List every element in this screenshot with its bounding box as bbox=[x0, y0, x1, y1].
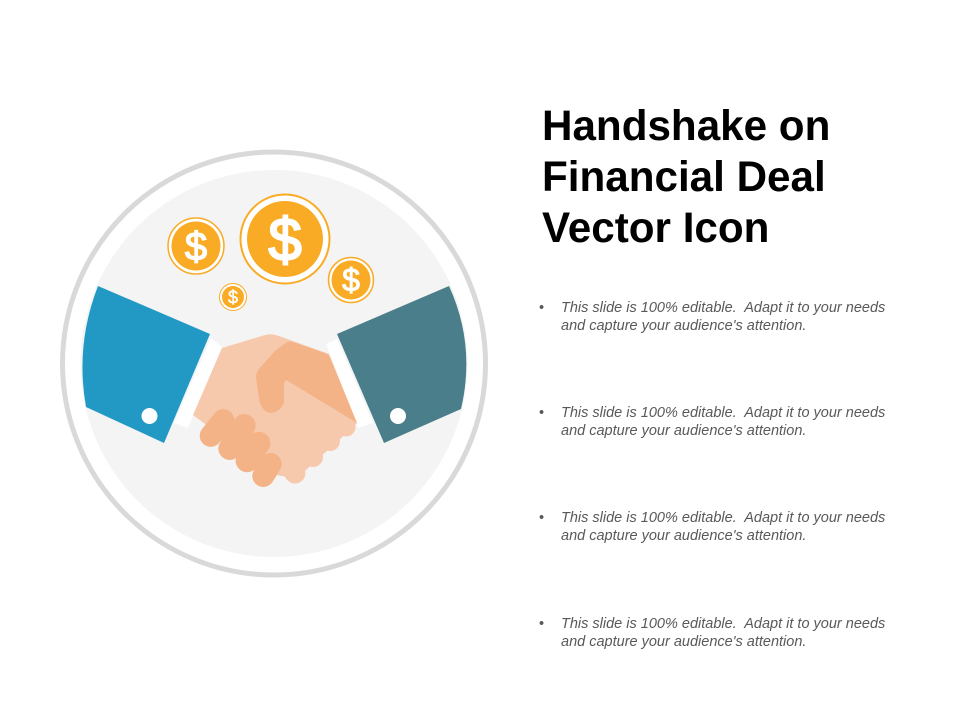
left sleeve bbox=[82, 286, 210, 443]
coin: small: $ bbox=[228, 288, 238, 308]
knuckle scallops bbox=[284, 418, 356, 484]
coin: large bbox=[240, 194, 330, 284]
bullet text 2: • bbox=[539, 405, 544, 421]
bullet text 4: This slide is 100% editable. Adapt it to your needs and capture your audience's attention. bbox=[561, 616, 885, 650]
bullet text 4: • bbox=[539, 616, 544, 632]
title: Vector Icon bbox=[542, 204, 769, 251]
title bbox=[542, 102, 830, 251]
finger 2 bbox=[214, 410, 260, 464]
right sleeve bbox=[337, 286, 466, 443]
title: Handshake on bbox=[542, 102, 830, 149]
coin: right bbox=[328, 258, 374, 302]
bullet text 2: This slide is 100% editable. Adapt it to your needs and capture your audience's attention. bbox=[561, 405, 885, 439]
light hand bbox=[193, 334, 357, 479]
coin: right: $ bbox=[342, 262, 360, 298]
bullet text 3: This slide is 100% editable. Adapt it to your needs and capture your audience's attention. bbox=[561, 510, 885, 544]
left cuff bbox=[174, 338, 222, 428]
right cuff bbox=[326, 339, 373, 428]
bullet text 3: • bbox=[539, 510, 544, 526]
coin: small bbox=[220, 284, 246, 310]
finger 3 bbox=[231, 427, 275, 477]
handshake bbox=[193, 334, 357, 491]
title: Financial Deal bbox=[542, 153, 826, 200]
bullet text 1: This slide is 100% editable. Adapt it to your needs and capture your audience's attention. bbox=[561, 300, 885, 334]
coin: large: $ bbox=[268, 206, 302, 273]
left button bbox=[142, 408, 158, 424]
finger 1 bbox=[195, 405, 239, 451]
outer ring bbox=[62, 152, 486, 575]
right button bbox=[390, 408, 406, 424]
coin: left: $ bbox=[185, 225, 207, 269]
dark thumb and hand top bbox=[256, 342, 357, 423]
coin: left bbox=[168, 218, 224, 274]
finger 4 bbox=[248, 449, 286, 491]
inner disc bbox=[80, 170, 468, 557]
bullet text 1: • bbox=[539, 300, 544, 316]
